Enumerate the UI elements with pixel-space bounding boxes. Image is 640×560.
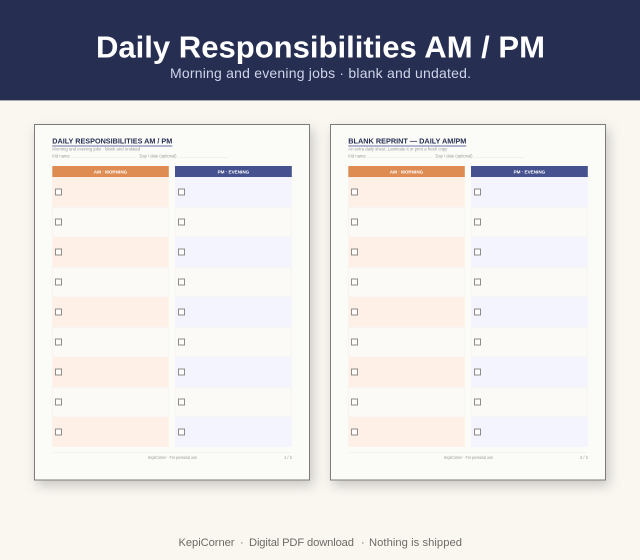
sheet 2 description: An extra daily sheet. Laminate it or print a fresh copy: [348, 146, 448, 152]
subtitle: Morning and evening jobs · blank and undated.: [170, 65, 471, 81]
sheet 1 PM header: [175, 166, 292, 177]
header band: [0, 0, 640, 101]
sheet 2 PM header: PM · EVENING: [514, 169, 546, 174]
sheet 1 title: DAILY RESPONSIBILITIES AM / PM: [52, 136, 172, 145]
sheet 2 name and date fields: Kid name: [348, 154, 366, 158]
sheet 1 AM header: [52, 166, 169, 177]
page footer caption: Nothing is shipped: [369, 537, 462, 549]
page footer caption: Digital PDF download: [249, 537, 354, 549]
sheet 1 AM rows: [52, 177, 169, 447]
page footer caption: [178, 537, 462, 549]
sheet 2 footer: 2 / 2: [580, 455, 589, 460]
page footer caption: ·: [240, 537, 244, 549]
sheet 1 name and date fields: Kid name: [52, 154, 70, 158]
panel: sheet 2 blank reprint: [330, 124, 606, 480]
sheet 2 AM rows: [348, 177, 465, 447]
sheet 1 AM header: AM · MORNING: [94, 169, 128, 174]
sheet 1 PM rows: [175, 177, 292, 447]
sheet 2 AM header: AM · MORNING: [390, 169, 424, 174]
title: Daily Responsibilities AM / PM: [96, 30, 545, 64]
page footer caption: KepiCorner: [178, 537, 235, 549]
sheet 2 PM header: [471, 166, 588, 177]
sheet 2 name and date fields: Day / date (optional): [436, 154, 473, 158]
sheet 2 footer: KepiCorner · For personal use: [444, 455, 494, 460]
sheet 2 PM rows: [471, 177, 588, 447]
sheet 1 footer: 1 / 2: [284, 455, 293, 460]
sheet 2 name and date fields: [348, 154, 524, 158]
panel: sheet 1 daily responsibilities: [34, 124, 310, 480]
sheet 2 title: BLANK REPRINT — DAILY AM/PM: [348, 136, 466, 145]
sheet 2 AM header: [348, 166, 465, 177]
sheet 1 name and date fields: [52, 154, 228, 158]
sheet 1 name and date fields: Day / date (optional): [140, 154, 177, 158]
sheet 1 footer: [148, 455, 293, 460]
sheet 1 footer: KepiCorner · For personal use: [148, 455, 198, 460]
sheet 1 description: Morning and evening jobs · blank and undated: [52, 146, 141, 152]
sheet 2 footer: [444, 455, 589, 460]
page footer caption: ·: [361, 537, 365, 549]
sheet 1 PM header: PM · EVENING: [218, 169, 250, 174]
